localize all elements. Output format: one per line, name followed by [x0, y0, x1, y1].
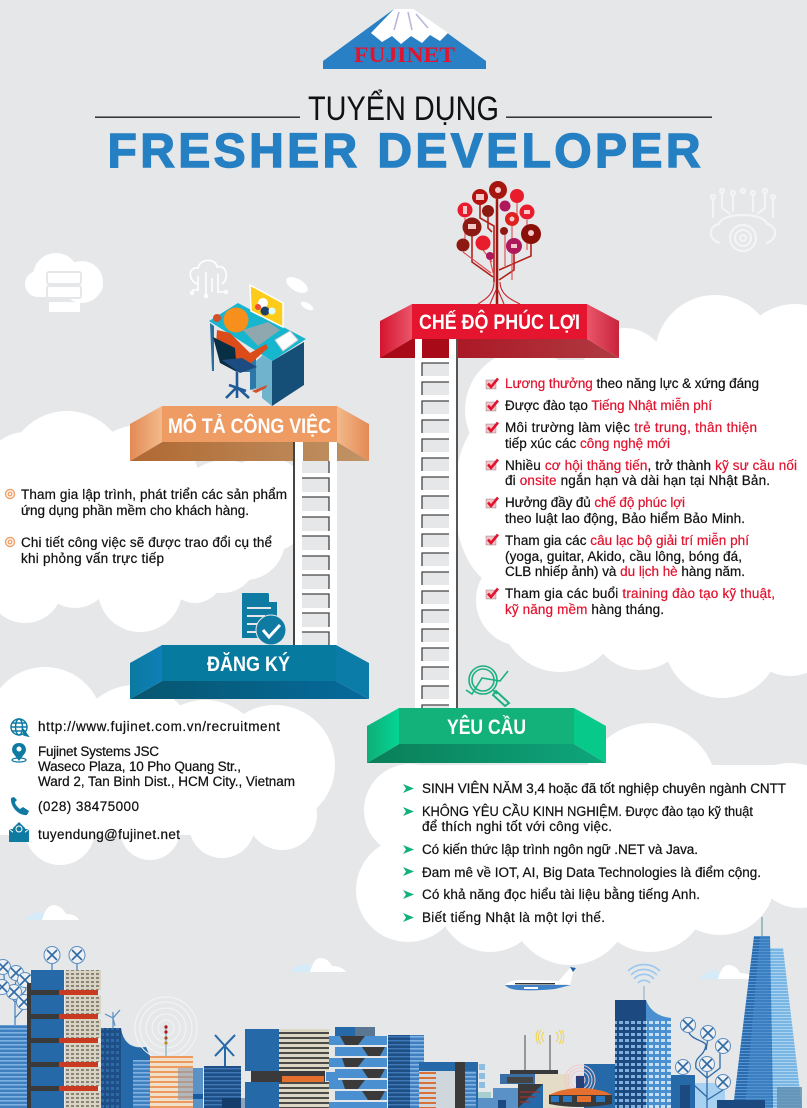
icon: phone [11, 797, 29, 815]
illustration: city skyline center [326, 1027, 570, 1108]
icon: document with check [242, 593, 286, 645]
text block: benefits list: theo luật lao động, Bảo hiểm Bảo Minh. [505, 511, 745, 526]
text block: benefits list: tiếp xúc các công nghệ mới [505, 436, 670, 451]
cloud: requirements background [356, 723, 807, 965]
text block: benefits list: Tham gia các câu lạc bộ giải trí miễn phí [505, 533, 749, 548]
decorative small clouds [284, 274, 315, 312]
signal rings tower [135, 997, 197, 1059]
text block: job description: Tham gia lập trình, phát triển các sản phẩm [21, 487, 287, 502]
block building [245, 1029, 329, 1108]
small clouds above the city [25, 905, 755, 979]
text block: benefits list: Hưởng đầy đủ chế độ phúc lợi [505, 495, 685, 510]
text block: requirements: để thích nghi tốt với công việc. [422, 819, 612, 834]
text block: contact: tuyendung@fujinet.net [38, 827, 180, 842]
text block: job description: ứng dụng phần mềm cho khách hàng. [21, 503, 249, 518]
icon: cloud server [25, 253, 103, 312]
icon: green arrows [403, 784, 414, 922]
title: Tuyển dụng: TUYỂN DỤNG [308, 90, 499, 128]
text block: requirements: SINH VIÊN NĂM 3,4 hoặc đã tốt nghiệp chuyên ngành CNTT [422, 781, 786, 796]
text block: job description: Chi tiết công việc sẽ được trao đổi cụ thể [21, 535, 272, 550]
illustration: airplane [505, 967, 576, 990]
cloud: job description background [0, 411, 313, 632]
icon: magnifier with chart [466, 666, 509, 706]
text block: contact: Waseco Plaza, 10 Pho Quang Str., [38, 759, 241, 774]
logo: Fujinet mountain: FUJINET [354, 42, 455, 67]
text block: benefits list: Lương thưởng theo năng lực & xứng đáng [505, 376, 759, 391]
banner: job description [130, 406, 369, 461]
text block: benefits list: Nhiều cơ hội thăng tiến, trở thành kỹ sư cầu nối [505, 458, 797, 473]
icon: target bullets [6, 490, 14, 546]
text block: benefits list: Tham gia các buổi training đào tạo kỹ thuật, [505, 586, 775, 601]
text block: contact: Fujinet Systems JSC [38, 744, 159, 759]
text block: requirements [403, 781, 786, 925]
cloud: contact background [0, 667, 335, 865]
banner: requirements: YÊU CẦU [447, 715, 526, 739]
tall tower with wifi [615, 965, 671, 1108]
illustration: city skyline left [0, 946, 329, 1108]
banner: apply [130, 645, 369, 699]
text block: job description [6, 487, 287, 566]
icon: brain and gear outline [711, 189, 775, 251]
text block: contact: Ward 2, Tan Binh Dist., HCM City., Vietnam [38, 774, 295, 789]
text block: benefits list: kỹ năng mềm hàng tháng. [505, 602, 664, 617]
cloud: benefits background [454, 295, 807, 698]
text block: benefits list: CLB nhiếp ảnh) và du lịch hè hàng năm. [505, 564, 745, 579]
icon: check marks [486, 378, 498, 599]
tree of wind fans [0, 960, 32, 1025]
banner: benefits [380, 304, 619, 358]
text block: benefits list [486, 376, 797, 617]
text block: contact [9, 719, 295, 842]
dome [549, 1088, 612, 1107]
illustration: person at desk [209, 285, 306, 406]
title: Fresher Developer: FRESHER DEVELOPER [108, 125, 700, 178]
icon: location pin [12, 743, 26, 762]
logo: Fujinet mountain [323, 9, 486, 69]
illustration: city skyline right [549, 917, 802, 1108]
ladder: short between job description and apply [293, 440, 337, 645]
tree of wind fans [676, 1018, 730, 1108]
text block: benefits list: (yoga, guitar, Akido, cầu lông, bóng đá, [505, 549, 742, 564]
antenna building [500, 1030, 570, 1108]
text block: job description: khi phỏng vấn trực tiếp [21, 551, 164, 566]
text block: benefits list: đi onsite ngắn hạn và dài hạn tại Nhật Bản. [505, 473, 770, 488]
text block: requirements: Có kiến thức lập trình ngôn ngữ .NET và Java. [422, 842, 698, 857]
icon: cloud circuit [190, 260, 227, 297]
text block: requirements: Đam mê về IOT, AI, Big Data Technologies là điểm cộng. [422, 865, 761, 880]
banner: requirements [367, 708, 606, 763]
banner: job description: MÔ TẢ CÔNG VIỆC [168, 414, 331, 438]
shard tower [717, 917, 802, 1108]
text block: requirements: Biết tiếng Nhật là một lợi thế. [422, 910, 605, 925]
banner: apply: ĐĂNG KÝ [207, 652, 290, 676]
text block: contact: (028) 38475000 [38, 799, 139, 814]
main tower [27, 946, 101, 1108]
text block: benefits list: Môi trường làm việc trẻ trung, thân thiện [505, 420, 757, 435]
text block: benefits list: Được đào tạo Tiếng Nhật miễn phí [505, 398, 712, 413]
text block: requirements: KHÔNG YÊU CẦU KINH NGHIỆM. Được đào tạo kỹ thuật [422, 804, 753, 819]
banner: benefits: CHẾ ĐỘ PHÚC LỢI [419, 310, 580, 334]
icon: globe [11, 719, 28, 736]
icon: envelope [9, 822, 29, 842]
text block: contact: http://www.fujinet.com.vn/recruitment [38, 719, 280, 734]
ladder: tall between benefits and requirements [415, 338, 458, 710]
icon: technology tree [456, 181, 541, 304]
text block: requirements: Có khả năng đọc hiểu tài liệu bằng tiếng Anh. [422, 887, 700, 902]
